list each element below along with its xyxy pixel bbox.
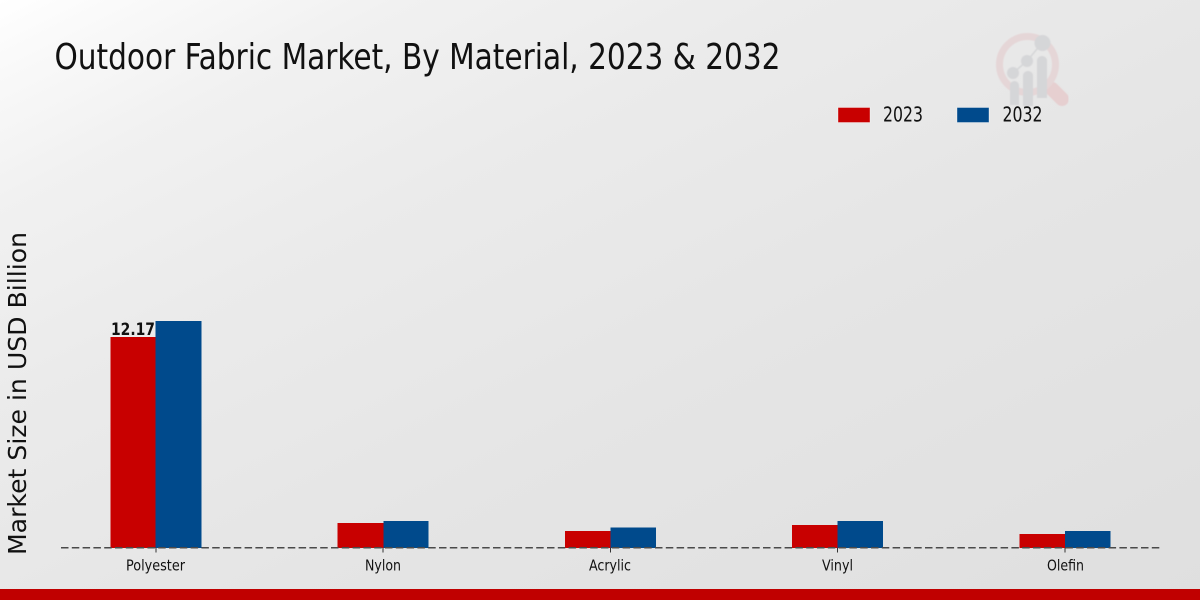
title: Outdoor Fabric Market, By Material, 2023 & 2032: [54, 37, 780, 78]
x axis labels: Polyester: [126, 557, 185, 575]
y axis label: Market Size in USD Billion: [3, 232, 32, 555]
legend: 2032: [957, 102, 1042, 126]
value label: 12.17: 12.17: [111, 320, 155, 339]
legend: 2032: 2032: [1002, 102, 1042, 126]
icon: magnifier logo watermark: [1000, 35, 1062, 106]
x axis labels: Nylon: [365, 557, 401, 575]
bars: Acrylic: [565, 528, 656, 548]
x axis baseline: [61, 547, 1160, 549]
x axis labels: Acrylic: [589, 557, 631, 575]
bar chart: [61, 320, 1160, 575]
bars: Vinyl: [792, 521, 883, 548]
x axis labels: Olefin: [1047, 557, 1084, 575]
bars: Polyester: [110, 321, 202, 548]
x axis labels: [126, 557, 1084, 575]
bars: Nylon: [338, 521, 428, 548]
legend: [838, 102, 1042, 126]
legend: 2023: 2023: [883, 102, 923, 126]
x axis labels: Vinyl: [822, 557, 853, 575]
bars: Olefin: [1020, 531, 1110, 548]
footer bar: [0, 589, 1200, 600]
legend: 2023: [838, 102, 923, 126]
